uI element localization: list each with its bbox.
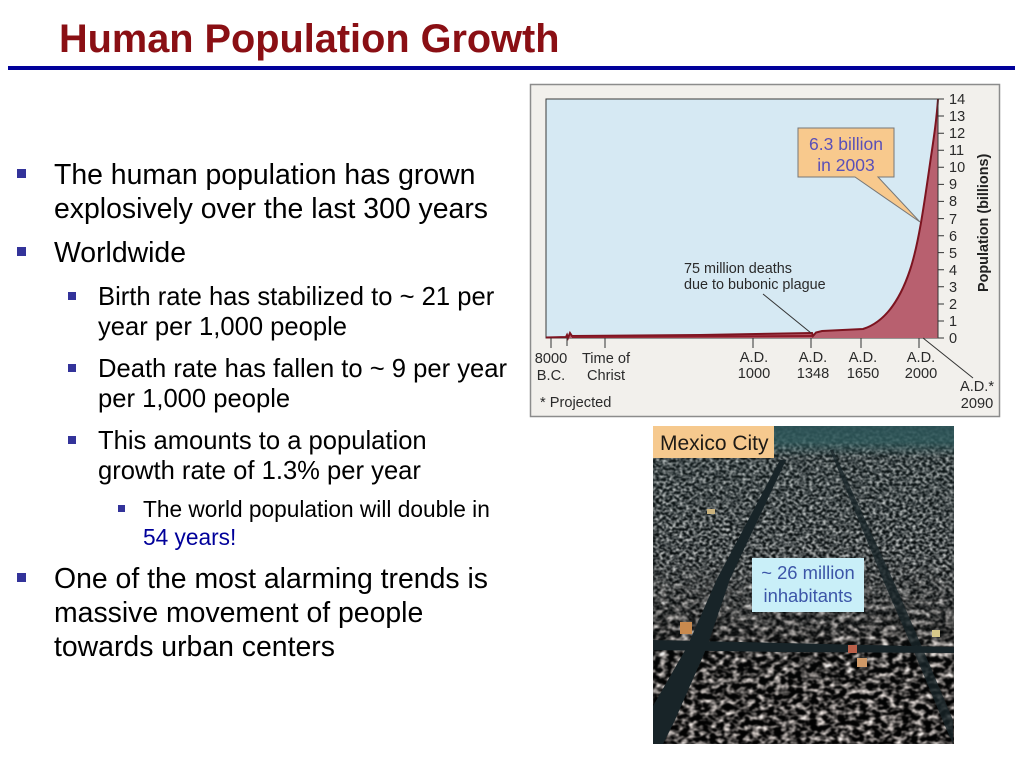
y axis with ticks: 12 [949, 126, 965, 142]
x axis ticks [551, 338, 919, 348]
y axis with ticks: 11 [949, 143, 964, 159]
y axis with ticks: 6 [949, 229, 957, 245]
sub-bullet: growth rate: This amounts to a population [98, 427, 427, 455]
sub-bullet: growth rate: growth rate of 1.3% per year [98, 457, 421, 485]
y axis with ticks [938, 92, 965, 347]
bullet: urban movement: massive movement of people [54, 597, 423, 629]
y axis with ticks: 10 [949, 160, 965, 176]
sub-bullet: birth rate [68, 283, 494, 341]
bullet: worldwide: Worldwide [54, 237, 186, 269]
sub-sub-bullet: doubling: The world population will double in [143, 496, 490, 522]
sub-bullet: death rate: Death rate has fallen to ~ 9 per year [98, 355, 507, 383]
x axis labels: 8000 [535, 351, 567, 367]
sub-sub-bullet: doubling: 54 years! [143, 524, 236, 550]
x axis labels: 1650 [847, 366, 879, 382]
bullet: explosive growth [17, 159, 488, 225]
population curve [546, 99, 938, 338]
callout: 26 million inhabitants [752, 558, 864, 612]
y axis with ticks: 4 [949, 263, 957, 279]
sub-sub-bullet: doubling [118, 496, 490, 550]
footnote: * Projected [540, 395, 611, 411]
label: Mexico City [653, 426, 774, 458]
y axis title: Population (billions) [976, 154, 992, 292]
x axis labels: 2090 [961, 396, 993, 412]
x axis labels: A.D. [740, 350, 768, 366]
callout: 26 million inhabitants: ~ 26 million [761, 562, 855, 583]
x axis labels: B.C. [537, 368, 565, 384]
text block: bullet list [17, 159, 507, 663]
callout: 6.3 billion: 6.3 billion [809, 134, 883, 154]
label: Mexico City: Mexico City [660, 432, 769, 455]
callout: 26 million inhabitants: inhabitants [764, 585, 852, 606]
x axis labels: 1000 [738, 366, 770, 382]
chart plot background [546, 99, 938, 338]
sub-bullet: death rate [68, 355, 507, 413]
y axis with ticks: 14 [949, 92, 965, 108]
x axis labels: 1348 [797, 366, 829, 382]
bullet: urban movement: towards urban centers [54, 631, 335, 663]
y axis with ticks: 5 [949, 246, 957, 262]
y axis with ticks: 8 [949, 194, 957, 210]
rooftops [680, 509, 940, 667]
y axis with ticks: 3 [949, 280, 957, 296]
sub-bullet: birth rate: Birth rate has stabilized to ~ 21 per [98, 283, 494, 311]
annotation: bubonic plague: 75 million deaths [684, 261, 792, 277]
callout: 6.3 billion [798, 128, 920, 222]
bullet: explosive growth: The human population has grown [54, 159, 475, 191]
x axis labels: A.D. [907, 350, 935, 366]
x axis labels: 2000 [905, 366, 937, 382]
y axis with ticks: 2 [949, 297, 957, 313]
bullet: explosive growth: explosively over the last 300 years [54, 193, 488, 225]
leader to A.D. 2090 [923, 338, 973, 378]
annotation: bubonic plague: due to bubonic plague [684, 277, 826, 293]
x axis labels [535, 350, 994, 412]
callout: 6.3 billion: in 2003 [817, 155, 875, 175]
x axis labels: A.D. [799, 350, 827, 366]
x axis labels: Time of [582, 351, 631, 367]
bullet: urban movement [17, 563, 488, 663]
annotation: bubonic plague [684, 261, 826, 333]
y axis with ticks: 7 [949, 212, 957, 228]
x axis labels: Christ [587, 368, 625, 384]
roads [653, 450, 954, 744]
x axis labels: A.D.* [960, 379, 994, 395]
y axis with ticks: 0 [949, 331, 957, 347]
sub-bullet: birth rate: year per 1,000 people [98, 313, 347, 341]
bullet: urban movement: One of the most alarming trends is [54, 563, 488, 595]
y axis with ticks: 1 [949, 314, 957, 330]
panel: Mexico City photo [653, 426, 954, 744]
title: Human Population Growth [59, 17, 559, 61]
sub-bullet: death rate: per 1,000 people [98, 385, 290, 413]
y axis with ticks: 13 [949, 109, 965, 125]
sub-bullet: growth rate [68, 427, 427, 485]
y axis with ticks: 9 [949, 177, 957, 193]
x axis labels: A.D. [849, 350, 877, 366]
